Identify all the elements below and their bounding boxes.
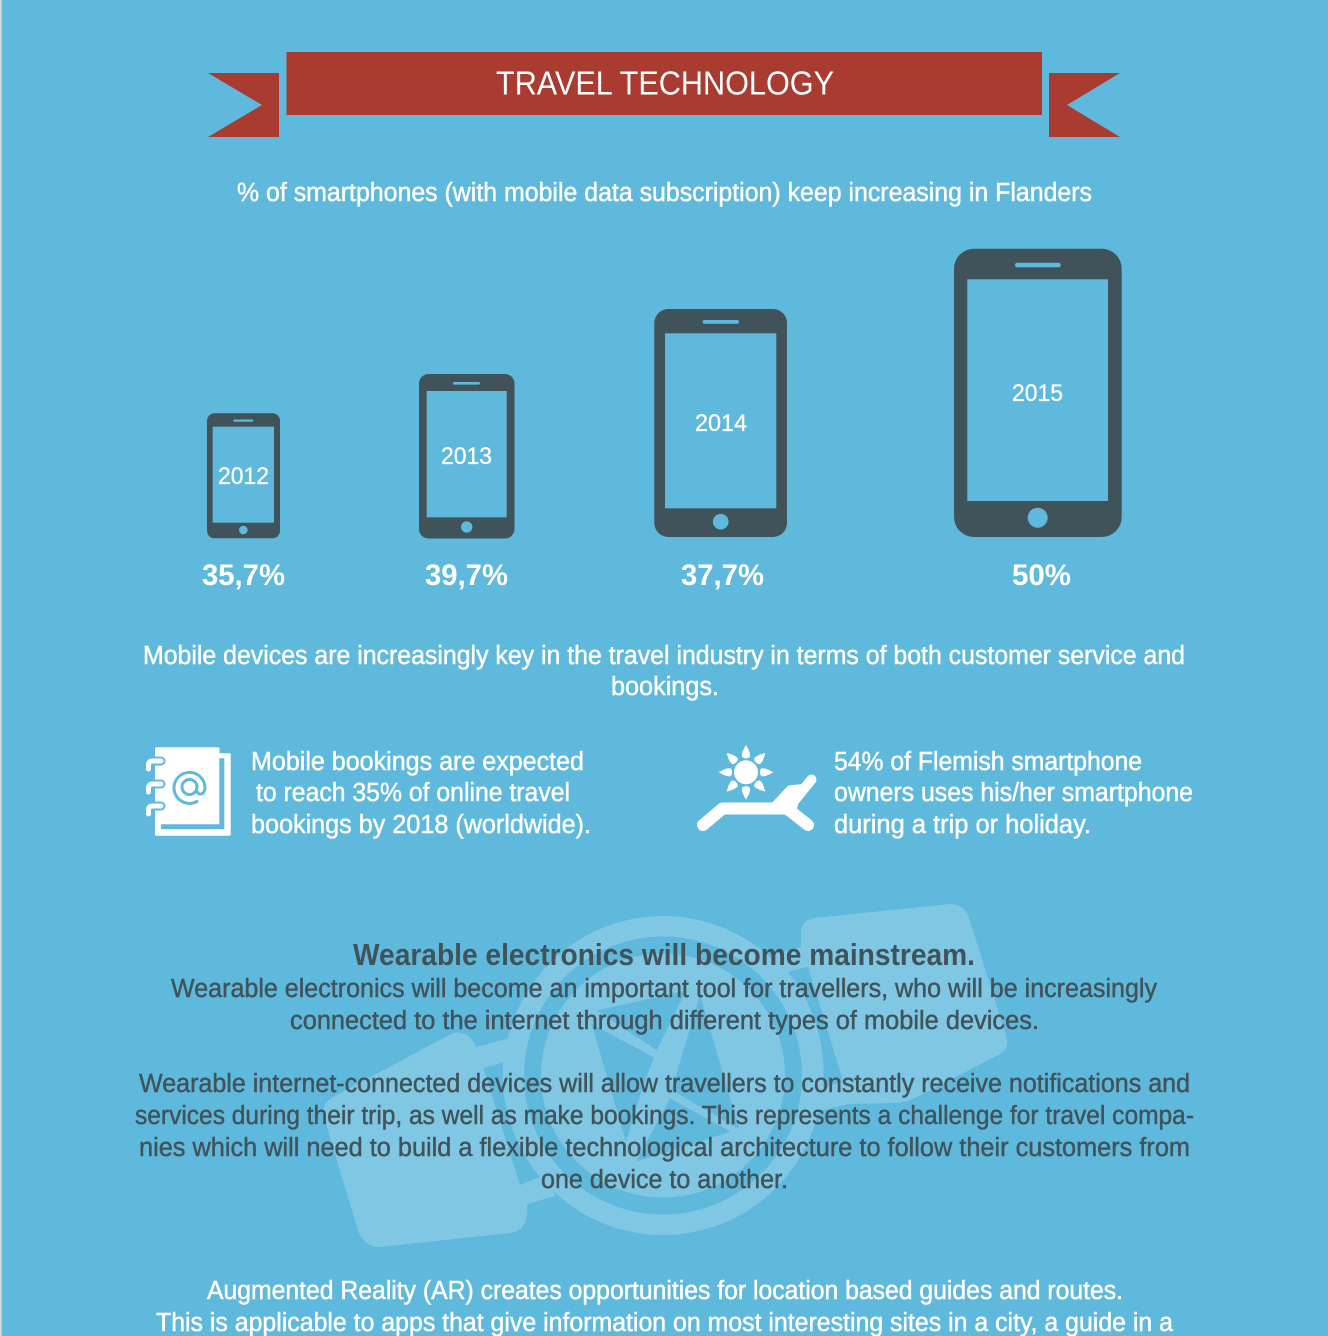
phone 2012: 2012 bbox=[218, 463, 269, 490]
phone 2014: 2014 bbox=[695, 410, 747, 437]
wearable electronics heading: Wearable electronics will become mainstream. bbox=[353, 937, 975, 972]
smartphone on holiday text: during a trip or holiday. bbox=[834, 811, 1091, 839]
mobile bookings text: bookings by 2018 (worldwide). bbox=[251, 811, 591, 839]
title: TRAVEL TECHNOLOGY bbox=[496, 64, 834, 102]
inner disc with logo bbox=[541, 954, 785, 1198]
icon: address book bbox=[148, 747, 231, 836]
outer ring bbox=[504, 916, 822, 1235]
smartphone on holiday text: owners uses his/her smartphone bbox=[834, 779, 1193, 807]
phone 2014 bbox=[654, 309, 787, 537]
wearable electronics paragraph 2: nies which will need to build a flexible technological architecture to follow their customers from bbox=[139, 1134, 1190, 1162]
banner left ribbon tail bbox=[208, 73, 279, 137]
percentage 2015: 50% bbox=[1012, 559, 1071, 592]
wearable electronics paragraph 2: Wearable internet-connected devices will allow travellers to constantly receive notifications and bbox=[139, 1070, 1190, 1098]
watermark: luggage and compass bbox=[323, 904, 1007, 1247]
icon: sun lounger bbox=[703, 745, 812, 825]
percentage 2013: 39,7% bbox=[425, 559, 508, 592]
augmented reality paragraph: Augmented Reality (AR) creates opportunities for location based guides and routes. bbox=[207, 1277, 1123, 1305]
wearable electronics paragraph 2 bbox=[135, 1070, 1194, 1194]
mobile bookings text: to reach 35% of online travel bbox=[256, 779, 570, 807]
percentage 2012: 35,7% bbox=[202, 559, 285, 592]
banner main band bbox=[286, 52, 1042, 115]
phone 2015: 2015 bbox=[1012, 380, 1063, 407]
title banner bbox=[208, 52, 1120, 137]
smartphone on holiday text: 54% of Flemish smartphone bbox=[834, 748, 1142, 776]
mobile bookings text: Mobile bookings are expected bbox=[251, 748, 584, 776]
wearable electronics paragraph 2: services during their trip, as well as make bookings. This represents a challenge for travel compa- bbox=[135, 1102, 1194, 1130]
phone 2015 bbox=[954, 249, 1122, 537]
intro paragraph: bookings. bbox=[611, 673, 719, 701]
subtitle: % of smartphones (with mobile data subscription) keep increasing in Flanders bbox=[237, 179, 1092, 207]
smartphone chart bbox=[202, 249, 1122, 592]
mobile bookings text bbox=[251, 748, 591, 839]
phone 2013 bbox=[419, 374, 514, 538]
banner right ribbon tail bbox=[1049, 73, 1120, 137]
augmented reality paragraph bbox=[156, 1277, 1174, 1336]
left suitcase bbox=[323, 1032, 555, 1247]
smartphone on holiday text bbox=[834, 748, 1193, 839]
phone 2013: 2013 bbox=[441, 443, 492, 470]
intro paragraph bbox=[143, 642, 1185, 701]
phone 2012 bbox=[207, 413, 280, 538]
percentage 2014: 37,7% bbox=[681, 559, 764, 592]
right suitcase bbox=[771, 904, 1007, 1112]
wearable electronics paragraph 1: connected to the internet through different types of mobile devices. bbox=[290, 1007, 1039, 1035]
wearable electronics paragraph 2: one device to another. bbox=[541, 1166, 788, 1194]
wearable electronics paragraph 1: Wearable electronics will become an important tool for travellers, who will be increasingly bbox=[171, 975, 1157, 1003]
wearable electronics paragraph 1 bbox=[171, 975, 1157, 1035]
intro paragraph: Mobile devices are increasingly key in the travel industry in terms of both customer service and bbox=[143, 642, 1185, 670]
